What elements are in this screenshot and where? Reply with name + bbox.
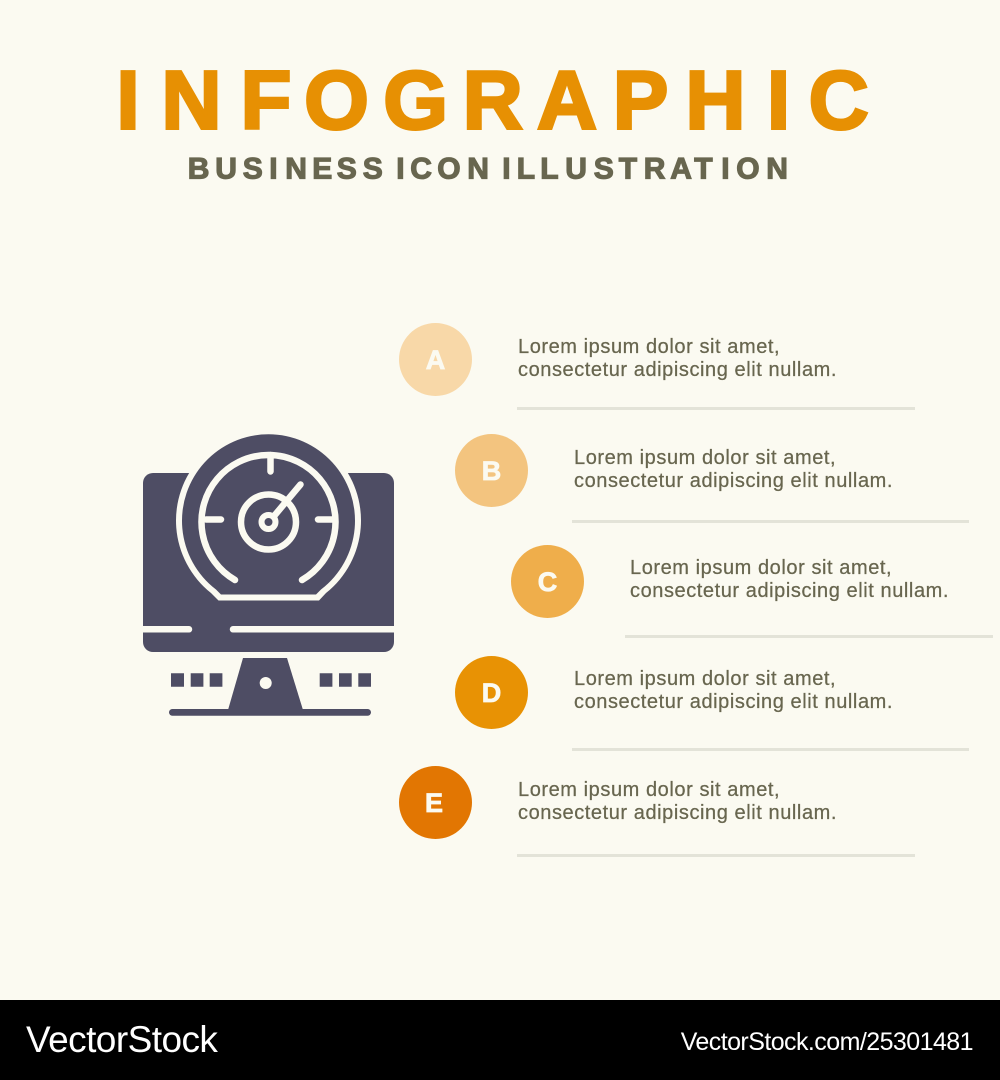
item A: consectetur adipiscing elit nullam. — [518, 359, 837, 381]
item D: D — [482, 678, 501, 708]
item E: E — [425, 788, 443, 818]
item C: C — [538, 567, 557, 597]
item A: A — [426, 345, 445, 375]
item D — [455, 656, 969, 751]
item B: consectetur adipiscing elit nullam. — [574, 470, 893, 492]
title: BUSINESS ICON ILLUSTRATION — [188, 152, 788, 185]
item B: Lorem ipsum dolor sit amet, — [574, 447, 836, 469]
icon: monitor with speedometer — [143, 434, 394, 716]
item C: Lorem ipsum dolor sit amet, — [630, 557, 892, 579]
item B — [455, 434, 969, 523]
item E: consectetur adipiscing elit nullam. — [518, 802, 837, 824]
title: INFOGRAPHIC — [116, 54, 869, 146]
item C: consectetur adipiscing elit nullam. — [630, 580, 949, 602]
item D: Lorem ipsum dolor sit amet, — [574, 668, 836, 690]
item A — [399, 323, 915, 410]
item D: consectetur adipiscing elit nullam. — [574, 691, 893, 713]
footer logo: VectorStock — [26, 1019, 217, 1060]
item A: Lorem ipsum dolor sit amet, — [518, 336, 780, 358]
item E — [399, 766, 915, 857]
item E: Lorem ipsum dolor sit amet, — [518, 779, 780, 801]
item B: B — [482, 456, 501, 486]
footer bar — [0, 1000, 1000, 1080]
item C — [511, 545, 993, 638]
footer url: VectorStock.com/25301481 — [681, 1028, 973, 1056]
